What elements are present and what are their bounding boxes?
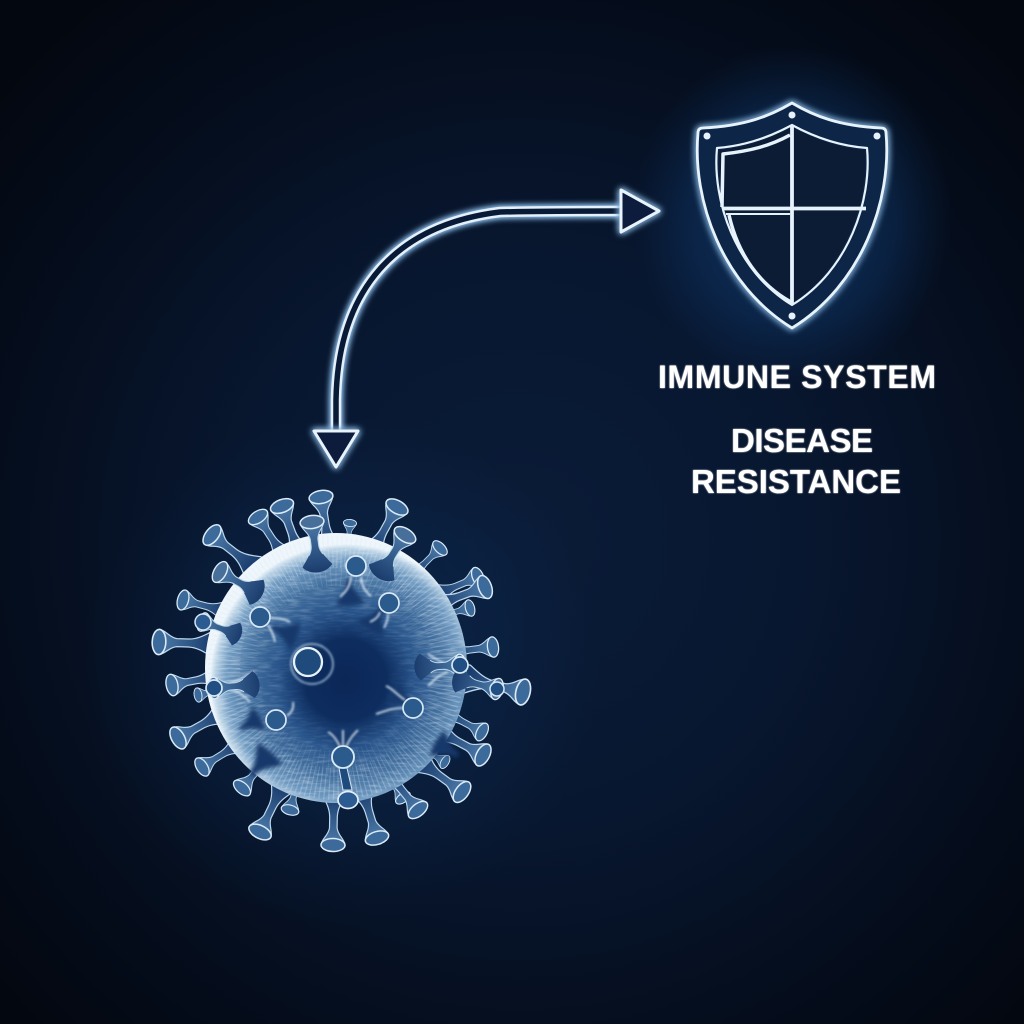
- shield icon: [697, 103, 887, 328]
- lower-left inner curve: [729, 215, 791, 302]
- lower-left top bar: [726, 213, 790, 215]
- label: immune system: IMMUNE SYSTEM: [658, 359, 936, 395]
- surface ring nodes: [250, 556, 423, 768]
- virus glow: [80, 415, 600, 925]
- shield quadrant fills: [719, 127, 865, 303]
- central pore: [291, 644, 333, 684]
- virus illustration: [152, 489, 533, 852]
- lower central stem: [339, 768, 352, 790]
- label: disease resistance: DISEASE: [731, 422, 873, 459]
- shield rivets: [704, 112, 880, 320]
- label: disease resistance: [691, 422, 901, 500]
- shield outer outline: [697, 103, 887, 328]
- right arrowhead: [621, 190, 659, 232]
- arrow shaft: [336, 211, 623, 432]
- shield glow: [632, 45, 952, 385]
- surface spike flares: [234, 578, 465, 785]
- down arrowhead: [314, 431, 358, 467]
- upper-left quadrant frame: [722, 135, 790, 207]
- shield inner outline: [716, 125, 868, 305]
- sphere: [205, 533, 467, 803]
- arrow shaft centre: [336, 211, 624, 434]
- foreground spikes: [194, 514, 506, 808]
- shield cross vertical: [790, 125, 794, 304]
- shield cross horizontal: [722, 207, 866, 210]
- label: disease resistance: RESISTANCE: [691, 463, 901, 500]
- surface white highlights: [226, 577, 450, 747]
- back spikes: [152, 489, 533, 852]
- curved double arrow: [314, 190, 659, 467]
- sphere fur texture: [200, 530, 472, 806]
